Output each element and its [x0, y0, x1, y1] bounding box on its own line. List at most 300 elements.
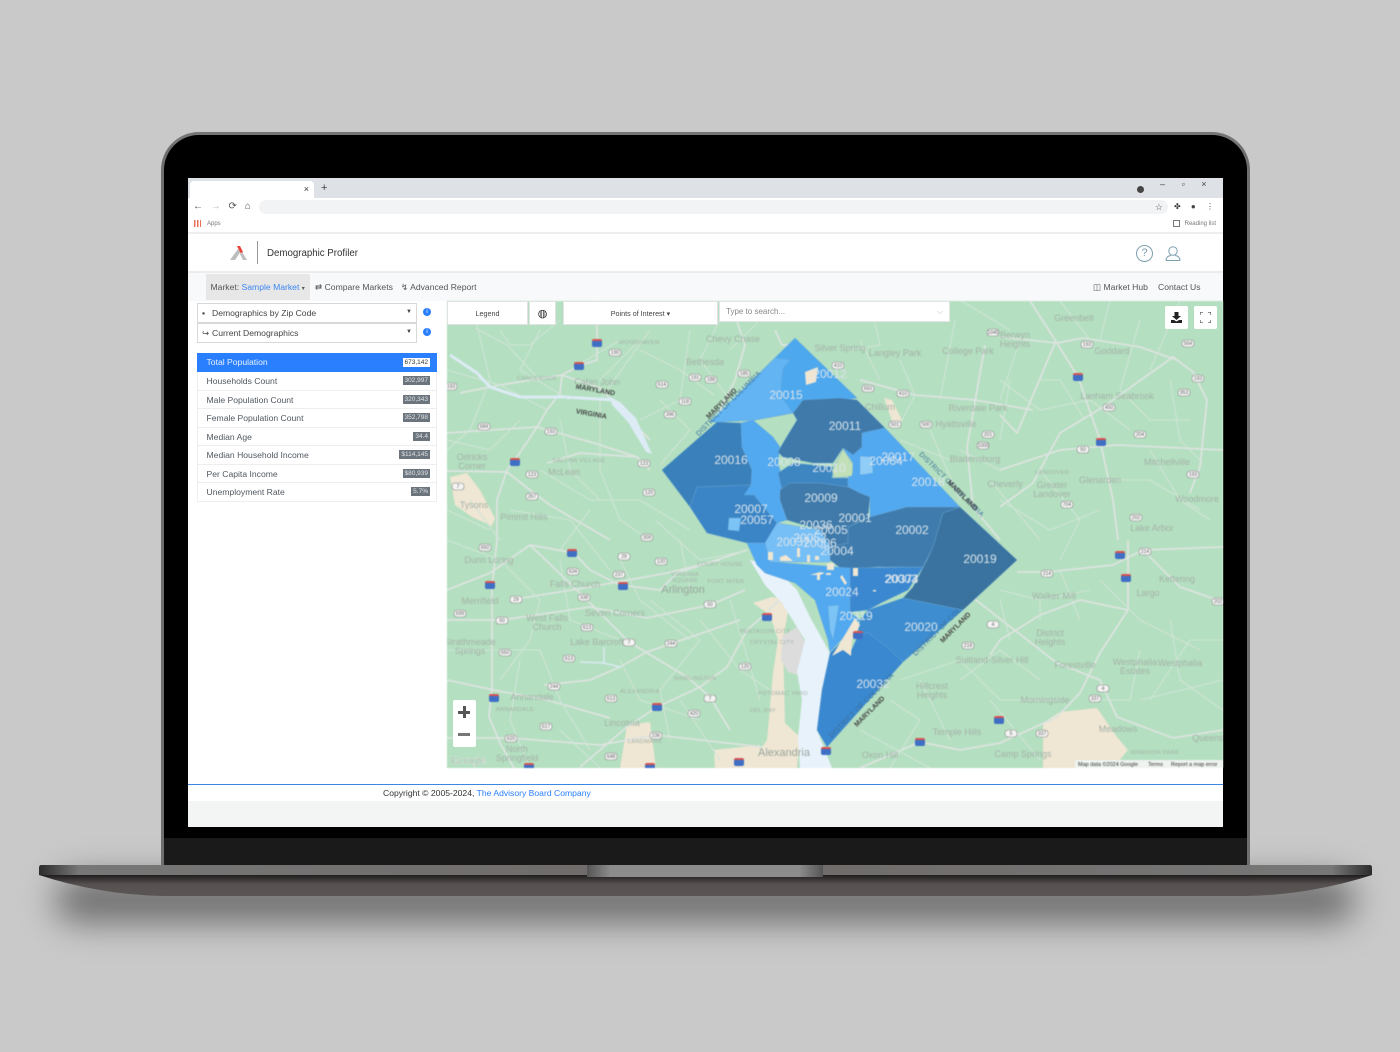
place labels: Cabin John: [574, 377, 620, 387]
map attribution bar: Terms: [1148, 762, 1163, 768]
zoom in: [458, 706, 470, 718]
place labels: FORT MYER: [708, 579, 744, 585]
zip code labels: 20374: [885, 572, 919, 586]
place labels: Westphalia: [1113, 657, 1157, 667]
footer band: [188, 801, 1223, 827]
place labels: Church: [532, 622, 562, 632]
route shield numbers: 191: [691, 375, 699, 381]
row: median age: 34.4: [415, 432, 428, 440]
green park: [832, 449, 853, 478]
route shield numbers: 202: [1214, 599, 1222, 605]
route shield numbers: 704: [1063, 502, 1071, 508]
profile indicator: [1137, 186, 1144, 193]
period selector: ▼: [406, 329, 412, 335]
route shield numbers: 501: [891, 422, 899, 428]
place labels: Queens: [1192, 733, 1223, 743]
zip code labels: 20018: [911, 475, 945, 489]
row: total population: 673,142: [404, 359, 428, 366]
zip code labels: 20064: [869, 454, 903, 468]
lake: [580, 647, 620, 667]
route shield numbers: 214: [1043, 571, 1051, 577]
route shield numbers: 185: [740, 371, 748, 377]
place labels: Springfield: [496, 753, 538, 763]
route shield numbers: 29: [513, 597, 519, 603]
place labels: WINDSOR PARK: [1131, 750, 1179, 756]
place labels: Merrifield: [461, 596, 499, 606]
map attribution bar: Map data ©2024 Google: [1078, 761, 1138, 768]
place labels: Corner: [458, 461, 486, 471]
zip code labels: 20003: [884, 572, 918, 586]
place labels: Alexandria: [758, 747, 811, 759]
row: male population: [197, 390, 437, 409]
place labels: PENTAGON CITY: [740, 629, 790, 635]
place labels: Westphalia: [1158, 658, 1202, 668]
points of interest dropdown: [563, 301, 718, 325]
district of columbia boundary labels: DISTRICT OF COLUMBIA: [828, 672, 896, 740]
place labels: Hyattsville: [935, 419, 977, 429]
route shield numbers: 338: [580, 595, 588, 601]
zip code labels: 20005: [814, 523, 848, 537]
row: female population: [197, 409, 437, 428]
copyright text: Copyright © 2005-2024, The Advisory Board Company: [383, 788, 591, 798]
laptop shadow: [55, 878, 1355, 922]
map: [446, 300, 1224, 769]
place labels: Suitland-Silver Hill: [955, 655, 1029, 665]
extension and profile icons: ✤ ● ⋮: [1174, 202, 1214, 211]
period selector: ↪: [202, 328, 209, 338]
route shield numbers: 337: [1038, 731, 1046, 737]
route shield numbers: 337: [1091, 696, 1099, 702]
route shield numbers: 50: [499, 618, 505, 624]
route shield numbers: [447, 330, 1222, 760]
district of columbia boundary labels: DISTRICT OF COLUMBIA: [912, 590, 980, 658]
search box: Type to search...: [726, 307, 785, 316]
row: median household income: [197, 446, 437, 464]
zip code labels: 20024: [825, 585, 859, 599]
place labels: SHIRLINGTON: [674, 676, 716, 682]
route shield numbers: 7: [457, 484, 460, 490]
row: male population: Male Population Count: [206, 394, 293, 404]
route shield numbers: 684: [480, 424, 488, 430]
place labels: Heights: [1000, 339, 1031, 349]
place labels: COURT HOUSE: [697, 562, 743, 568]
zip code labels: 20020: [904, 620, 938, 634]
address bar: [259, 200, 1168, 214]
legend button: Legend: [476, 309, 499, 318]
place labels: Lincolnia: [604, 718, 640, 728]
choropleth zip code regions: [662, 338, 1017, 747]
place labels: Kettering: [1159, 574, 1195, 584]
row: unemployment rate: [197, 483, 437, 502]
place labels: College Park: [942, 346, 994, 356]
globe button: [529, 301, 556, 325]
zip code labels: 20004: [820, 544, 854, 558]
route shield numbers: 617: [542, 724, 550, 730]
place labels: ANNANDALE: [496, 707, 534, 713]
market hub link: ◫ Market Hub: [1093, 282, 1148, 292]
place labels: SQUARE: [672, 578, 698, 584]
route shield numbers: 648: [607, 754, 615, 760]
place labels: McLean: [548, 467, 580, 477]
legend button: [447, 301, 528, 325]
route shield numbers: 118: [681, 399, 689, 405]
info icon: [423, 328, 431, 336]
district of columbia boundary labels: DISTRICT OF COLUMBIA: [695, 370, 763, 438]
zip code labels: 20001: [838, 511, 872, 525]
lower bezel: [164, 838, 1247, 865]
route shield numbers: 634: [569, 569, 577, 575]
search box: ⌵: [937, 307, 943, 316]
points of interest dropdown: Points of Interest ▾: [611, 309, 670, 318]
place labels: Heights: [917, 690, 948, 700]
market selector: [206, 274, 310, 300]
route shield numbers: 650: [864, 386, 872, 392]
region: zip 20002: [830, 507, 960, 570]
place labels: Largo: [1136, 588, 1160, 598]
place labels: Chevy Chase: [706, 334, 760, 344]
place labels: LANDOVER: [1035, 470, 1069, 476]
row: male population: 320,343: [404, 396, 428, 402]
place labels: Pimmit Hills: [500, 512, 548, 522]
place labels: VIRGINIA: [671, 572, 699, 578]
place labels: Falls Church: [550, 579, 600, 589]
app header: [188, 235, 1223, 273]
place labels: DEL RAY: [750, 708, 776, 714]
place labels: Hillcrest: [916, 681, 948, 691]
major roads: [447, 301, 1223, 768]
potomac river upstream: [450, 355, 614, 400]
place labels: WOODHAVEN: [619, 340, 659, 346]
place labels: Morningside: [1020, 695, 1070, 705]
info icon: [423, 308, 431, 316]
zip code labels: 20319: [839, 609, 873, 623]
route shield numbers: 564: [1184, 341, 1192, 347]
route shield numbers: 50: [1080, 447, 1086, 453]
region: top light area: [710, 338, 857, 422]
route shield numbers: 309: [643, 535, 651, 541]
route shield numbers: 650: [481, 545, 489, 551]
district of columbia boundary labels: [695, 370, 985, 740]
apps label: Apps: [207, 221, 221, 227]
place labels: Landover: [1033, 489, 1071, 499]
navigation buttons: ← → ⟳ ⌂: [193, 201, 251, 212]
state border labels: MARYLAND: [939, 611, 972, 644]
row: median household income: Median Household Income: [206, 450, 309, 460]
region: zip 20015: [712, 358, 793, 422]
place labels: Riverdale Park: [948, 403, 1008, 413]
navigation bar: [188, 273, 1223, 301]
place labels: West Falls: [526, 613, 568, 623]
row: unemployment rate: 5.7%: [413, 488, 428, 495]
place labels: Temple Hills: [933, 727, 982, 737]
market selector: Market: Sample Market ▾: [210, 282, 305, 292]
region: zip 20003: [850, 567, 923, 612]
place labels: CARDEROCK: [517, 376, 557, 382]
apps icon: [194, 220, 201, 227]
reading list: [1173, 220, 1216, 227]
light block: [828, 605, 839, 640]
route shield numbers: 236: [652, 733, 660, 739]
place labels: Meadows: [1099, 724, 1138, 734]
user icon: [1166, 246, 1180, 261]
row: households count: Households Count: [206, 376, 277, 386]
route shield numbers: 4: [992, 622, 995, 628]
district of columbia boundary labels: DISTRICT OF COLUMBIA: [917, 451, 985, 519]
light block: [728, 518, 741, 531]
route shield numbers: 214: [1141, 549, 1149, 555]
region: zip 20007: [690, 485, 777, 543]
period selector: [197, 323, 417, 343]
route shield numbers: 7: [709, 696, 712, 702]
route shield numbers: 237: [615, 572, 623, 578]
row: per capita income: [197, 464, 437, 483]
address bar: ☆: [1155, 202, 1163, 212]
route shield numbers: 120: [657, 559, 665, 565]
place labels: Langley Park: [869, 348, 922, 358]
active tab: [190, 181, 314, 198]
row: median age: [197, 428, 437, 446]
zip code labels: 20007: [734, 502, 768, 516]
browser toolbar: [188, 198, 1223, 217]
route shield numbers: 123: [640, 461, 648, 467]
info icon: i: [426, 309, 428, 315]
region: downtown: [765, 523, 830, 562]
route shield numbers: 650: [501, 650, 509, 656]
region: zip 20010: [778, 463, 848, 490]
zip code labels: 20057: [740, 513, 774, 527]
route shield numbers: 410: [899, 391, 907, 397]
advanced report link: ↯ Advanced Report: [401, 282, 477, 292]
route shield numbers: 396: [666, 412, 674, 418]
footer rule: [188, 784, 1223, 785]
contact us link: Contact Us: [1158, 282, 1201, 292]
state border labels: MARYLAND: [946, 479, 979, 512]
route shield numbers: 244: [667, 641, 675, 647]
place labels: North: [506, 744, 528, 754]
place labels: Estates: [1120, 666, 1151, 676]
place labels: Chillum: [865, 402, 895, 412]
fullscreen button: [1194, 306, 1217, 329]
zip code labels: 20008: [767, 455, 801, 469]
place labels: Lanham Seabrook: [1080, 391, 1154, 401]
region: zip 20020: [857, 598, 963, 662]
route shield numbers: 410: [834, 363, 842, 369]
state border labels: MARYLAND: [705, 387, 738, 420]
globe button: ◍: [538, 308, 547, 320]
zip code labels: 20012: [813, 367, 847, 381]
place labels: Mitchellville: [1144, 457, 1190, 467]
place labels: Cheverly: [987, 479, 1023, 489]
zip code labels: 20052: [793, 531, 827, 545]
reading list icon: [1173, 220, 1180, 227]
route shield numbers: 193: [547, 429, 555, 435]
row: median age: Median Age: [206, 432, 252, 442]
place labels: Lake Barcroft: [570, 637, 624, 647]
state border labels: MARYLAND: [853, 695, 886, 728]
route shield numbers: 123: [528, 472, 536, 478]
route shield numbers: 500: [922, 422, 930, 428]
demographics selector: Demographics by Zip Code: [212, 308, 316, 318]
logo divider: [257, 241, 258, 264]
region: zip 20008: [741, 420, 788, 523]
route shield numbers: 201: [984, 432, 992, 438]
route shield numbers: 420: [690, 711, 698, 717]
route shield numbers: 1000: [977, 443, 989, 449]
region: zip 20009: [780, 483, 870, 547]
place labels: Seven Corners: [585, 608, 646, 618]
route shield numbers: 613: [583, 625, 591, 631]
row: unemployment rate: Unemployment Rate: [206, 487, 285, 497]
region: zip 20017 and 20018: [843, 428, 960, 517]
info icon: i: [426, 329, 428, 335]
map attribution bar: [1075, 760, 1223, 768]
app title: Demographic Profiler: [267, 248, 358, 259]
state border labels: VIRGINIA: [575, 408, 607, 421]
route shield numbers: 613: [565, 656, 573, 662]
route shield numbers: 4: [1102, 686, 1105, 692]
route shield numbers: 193: [1189, 472, 1197, 478]
route shield numbers: 7: [628, 640, 631, 646]
place labels: Greenbelt: [1054, 313, 1094, 323]
route shield numbers: 204: [1136, 432, 1144, 438]
route shield numbers: 202: [1132, 515, 1140, 521]
zip code labels: 20017: [881, 450, 915, 464]
route shield numbers: 193: [447, 384, 455, 390]
row: total population: [197, 353, 437, 372]
laptop base: [39, 865, 1372, 896]
row: per capita income: Per Capita Income: [206, 468, 278, 478]
download button: [1165, 306, 1188, 329]
zip code labels: 20010: [812, 461, 846, 475]
zip code labels: 20015: [769, 388, 803, 402]
state border labels: [575, 384, 979, 728]
bookmarks bar: [188, 217, 1223, 234]
new tab plus: +: [321, 182, 327, 194]
place labels: [444, 313, 1224, 763]
fullscreen icon: [1200, 312, 1211, 323]
place labels: Greater: [1037, 480, 1067, 490]
place labels: Bethesda: [686, 357, 724, 367]
laptop lid: [161, 132, 1250, 866]
region: zip 20016: [662, 422, 752, 507]
route shield numbers: 193: [1083, 342, 1091, 348]
potomac river wide section: [610, 397, 652, 454]
route shields: [445, 329, 1224, 760]
route shield numbers: 190: [611, 350, 619, 356]
place labels: CRYSTAL CITY: [750, 640, 794, 646]
zip code labels: 20011: [829, 419, 862, 433]
route shield numbers: 5: [1010, 731, 1013, 737]
zip code labels: [714, 367, 997, 691]
route shield numbers: 267: [528, 494, 536, 500]
place labels: Tysons: [460, 500, 489, 510]
browser screen: [188, 178, 1223, 827]
demographics selector: [197, 303, 417, 323]
place labels: Dunn Loring: [464, 555, 514, 565]
browser tab strip: [188, 178, 1223, 198]
row: total population: Total Population: [206, 357, 268, 367]
zip code labels: 20002: [895, 523, 929, 537]
place labels: ALEXANDRIA: [620, 689, 660, 695]
zip code labels: 20037: [776, 535, 810, 549]
search box: [719, 301, 950, 322]
google logo: Google: [451, 755, 486, 767]
route shield numbers: 120: [645, 490, 653, 496]
place labels: District: [1036, 628, 1064, 638]
zip code labels: 20019: [963, 552, 997, 566]
region: georgetown sliver: [747, 543, 773, 573]
region: zip 20024: [765, 562, 860, 652]
tan land areas: [450, 398, 1128, 768]
region: zip 20032: [817, 632, 903, 747]
place labels: Bladensburg: [950, 454, 1000, 464]
place labels: Heights: [1035, 637, 1066, 647]
row: households count: 302,997: [404, 377, 428, 384]
demographics selector: ▪: [202, 308, 205, 318]
route shield numbers: 193: [1194, 376, 1202, 382]
place labels: Silver Spring: [814, 343, 866, 353]
reading list: Reading list: [1185, 221, 1216, 227]
zoom controls: [453, 700, 476, 747]
row: female population: Female Population Count: [206, 413, 303, 423]
route shield numbers: 50: [707, 602, 713, 608]
row: households count: [197, 372, 437, 390]
metric list: [197, 353, 437, 502]
place labels: Annandale: [510, 692, 554, 702]
active tab: ×: [304, 184, 309, 194]
place labels: Woodmore: [1175, 494, 1219, 504]
route shield numbers: 218: [964, 643, 972, 649]
row: median household income: $114,145: [401, 451, 428, 458]
help icon: [1136, 245, 1153, 262]
place labels: Berwyn: [1000, 330, 1030, 340]
row: female population: 352,798: [404, 414, 428, 421]
place labels: Walker Mill: [1032, 591, 1076, 601]
place labels: POTOMAC YARD: [758, 691, 808, 697]
route shield numbers: 450: [1105, 405, 1113, 411]
zip code labels: 20036: [799, 518, 833, 532]
route shield numbers: 29: [621, 554, 627, 560]
region: zip 20011: [778, 398, 885, 463]
interstate shields: [485, 339, 1131, 771]
logo: [230, 246, 247, 260]
tan patches: [768, 367, 876, 656]
potomac river: [750, 560, 832, 768]
route shield numbers: 188: [707, 377, 715, 383]
zip code labels: 20006: [803, 536, 837, 550]
route shield numbers: 244: [550, 684, 558, 690]
demographics selector: ▼: [406, 309, 412, 315]
place labels: Forestville: [1054, 660, 1096, 670]
place labels: Goddard: [1094, 346, 1130, 356]
zip code labels: 20009: [804, 491, 838, 505]
download icon: [1171, 312, 1182, 323]
route shield numbers: 613: [607, 696, 615, 702]
zip code labels: 20032: [856, 677, 890, 691]
minor roads: [447, 300, 1223, 768]
place labels: Lake Arbor: [1130, 523, 1174, 533]
row: per capita income: $80,939: [404, 470, 428, 476]
route shield numbers: 953: [1180, 390, 1188, 396]
route shield numbers: 620: [507, 736, 515, 742]
route shield numbers: 614: [658, 382, 666, 388]
light block: [860, 456, 873, 475]
airport grey area: [781, 627, 809, 677]
place labels: Camp Springs: [994, 749, 1052, 759]
help icon: ?: [1141, 247, 1148, 259]
route shield numbers: 1045: [987, 330, 999, 336]
place labels: Oxon Hill: [862, 750, 898, 760]
